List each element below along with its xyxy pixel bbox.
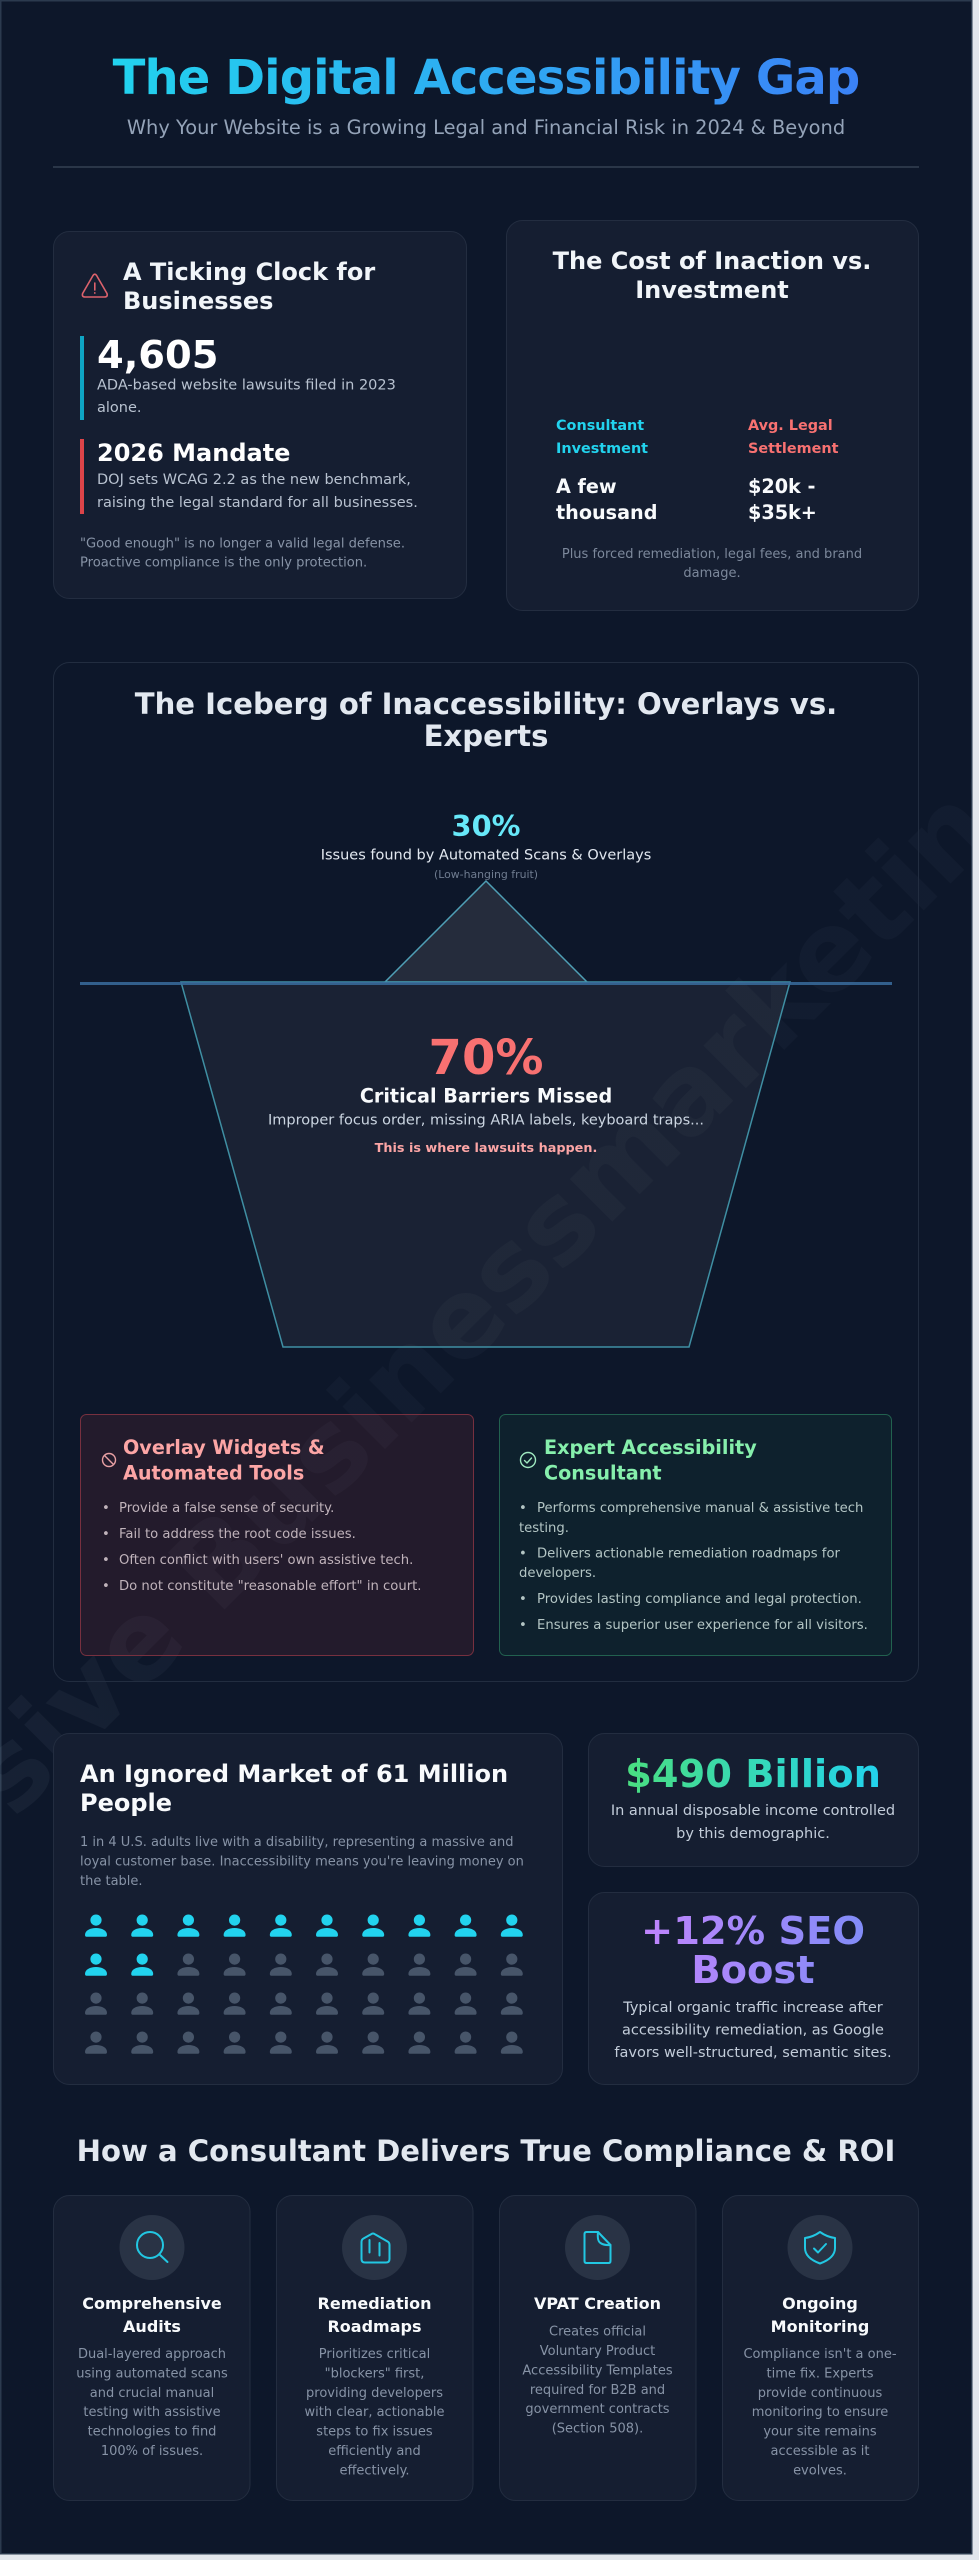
label: 70 percent: Critical Barriers Missed: [360, 1084, 612, 1108]
column: consultant: A few: [556, 475, 617, 498]
title: Comprehensive: [82, 2294, 222, 2313]
stat: 2026 mandate: raising the legal standard for all businesses.: [97, 495, 418, 511]
list: [519, 1501, 868, 1633]
heading: A Ticking Clock for: [123, 258, 375, 286]
icon: check circle: [520, 1452, 536, 1468]
heading: Investment: [635, 276, 789, 304]
column: settlement: $35k+: [748, 501, 817, 524]
column: settlement: Settlement: [748, 441, 839, 457]
heading: The Iceberg of Inaccessibility: Overlays vs.: [135, 687, 837, 721]
pictogram: people: [85, 1914, 523, 2054]
stat value: +12% SEO: [641, 1909, 865, 1954]
title: The Digital Accessibility Gap: [113, 50, 859, 106]
label: 70 percent: 70%: [429, 1030, 543, 1086]
panel: overlay widgets: [80, 1414, 474, 1656]
description: monitoring to ensure: [752, 2405, 888, 2420]
panel: expert consultant: [500, 1414, 892, 1656]
description: effectively.: [339, 2464, 410, 2478]
description: efficiently and: [328, 2444, 421, 2459]
stat description: favors well-structured, semantic sites.: [614, 2045, 892, 2061]
description: required for B2B and: [530, 2383, 665, 2398]
section heading: How a Consultant Delivers True Compliance & ROI: [77, 2134, 895, 2168]
column: settlement: $20k -: [748, 475, 815, 498]
column: settlement: Avg. Legal: [748, 418, 833, 434]
description: (Section 508).: [552, 2422, 643, 2436]
list: •: [102, 1501, 110, 1516]
card: monitoring: [722, 2196, 918, 2500]
list: •: [102, 1579, 110, 1594]
list: [102, 1501, 422, 1594]
icon: roadmap: [342, 2215, 407, 2280]
heading: Overlay Widgets &: [123, 1436, 325, 1459]
stat: 2026 mandate: DOJ sets WCAG 2.2 as the new benchmark,: [97, 472, 411, 488]
water line: [80, 982, 892, 985]
stat description: In annual disposable income controlled: [611, 1803, 895, 1819]
heading: Expert Accessibility: [544, 1436, 757, 1459]
heading: Experts: [424, 719, 548, 753]
note: "Good enough" is no longer a valid legal defense.: [80, 536, 405, 552]
list: Ensures a superior user experience for all visitors.: [537, 1618, 868, 1633]
description: "blockers" first,: [325, 2366, 424, 2382]
list: •: [102, 1553, 110, 1568]
stat description: by this demographic.: [676, 1826, 830, 1842]
description: 100% of issues.: [101, 2444, 203, 2459]
description: time fix. Experts: [766, 2366, 874, 2382]
description: Creates official: [549, 2324, 646, 2340]
stat: lawsuits: [80, 333, 396, 420]
description: Dual-layered approach: [78, 2347, 226, 2362]
list: Often conflict with users' own assistive tech.: [119, 1553, 413, 1568]
stat: 2026 mandate: [80, 439, 418, 514]
description: Prioritizes critical: [319, 2347, 430, 2362]
column: consultant: Investment: [556, 441, 648, 457]
subtitle: Why Your Website is a Growing Legal and Financial Risk in 2024 & Beyond: [127, 116, 845, 139]
stat value: $490 Billion: [625, 1752, 881, 1797]
stat description: Typical organic traffic increase after: [622, 2000, 883, 2016]
list: •: [519, 1546, 527, 1562]
stat: lawsuits: alone.: [97, 400, 142, 416]
heading: Automated Tools: [123, 1462, 304, 1484]
panel: cost of inaction: [506, 220, 918, 610]
list: Performs comprehensive manual & assistive tech: [537, 1501, 863, 1516]
heading: People: [80, 1789, 172, 1817]
description: provide continuous: [758, 2386, 882, 2401]
heading: Consultant: [544, 1462, 662, 1484]
panel: 490 billion: [588, 1734, 918, 1866]
description: testing with assistive: [83, 2405, 221, 2420]
description: accessible as it: [770, 2444, 870, 2459]
header: [113, 50, 859, 139]
description: providing developers: [306, 2386, 443, 2401]
title: Remediation: [318, 2294, 431, 2313]
description: evolves.: [793, 2464, 847, 2478]
icon: magnifier: [120, 2215, 184, 2280]
stat: lawsuits: ADA-based website lawsuits filed in 2023: [97, 378, 396, 394]
list: •: [519, 1618, 527, 1633]
column: consultant: Consultant: [556, 418, 644, 434]
description: and crucial manual: [90, 2386, 214, 2401]
list: Fail to address the root code issues.: [119, 1527, 356, 1542]
title: Monitoring: [771, 2317, 869, 2336]
label: 30 percent: [321, 809, 651, 881]
icon: warning triangle: [82, 274, 107, 297]
column: settlement: [748, 418, 839, 524]
note: Proactive compliance is the only protection.: [80, 556, 367, 570]
paragraph: 1 in 4 U.S. adults live with a disability, representing a massive and: [80, 1835, 514, 1850]
panel: a ticking clock: [54, 232, 466, 598]
list: Do not constitute "reasonable effort" in court.: [119, 1579, 422, 1594]
stat value: Boost: [691, 1948, 815, 1993]
panel: seo boost: [588, 1892, 918, 2084]
heading: The Cost of Inaction vs.: [553, 247, 871, 275]
label: 70 percent: This is where lawsuits happen.: [375, 1141, 597, 1156]
label: 70 percent: [268, 1030, 704, 1156]
title: VPAT Creation: [534, 2294, 661, 2313]
paragraph: the table.: [80, 1874, 143, 1889]
description: using automated scans: [76, 2366, 228, 2382]
label: 70 percent: Improper focus order, missing ARIA labels, keyboard traps...: [268, 1112, 704, 1128]
stat: 2026 mandate: 2026 Mandate: [97, 439, 290, 467]
description: your site remains: [763, 2424, 877, 2440]
note: Plus forced remediation, legal fees, and brand: [562, 547, 862, 562]
list: •: [519, 1592, 527, 1607]
card: vpat: [500, 2196, 696, 2500]
iceberg body: [181, 982, 790, 1347]
heading: Businesses: [123, 287, 273, 315]
list: •: [102, 1527, 110, 1542]
icon: document: [565, 2215, 630, 2280]
description: with clear, actionable: [305, 2405, 444, 2420]
description: Accessibility Templates: [522, 2364, 673, 2378]
title: Ongoing: [782, 2294, 858, 2313]
iceberg diagram: [80, 809, 892, 1347]
description: government contracts: [525, 2402, 670, 2417]
description: Compliance isn't a one-: [743, 2347, 897, 2362]
list: developers.: [519, 1566, 596, 1581]
description: technologies to find: [88, 2424, 216, 2440]
note: damage.: [683, 566, 741, 581]
label: 30 percent: 30%: [452, 809, 520, 843]
heading: An Ignored Market of 61 Million: [80, 1760, 508, 1788]
column: consultant: thousand: [556, 501, 657, 524]
list: Provides lasting compliance and legal protection.: [537, 1592, 862, 1607]
label: 30 percent: (Low-hanging fruit): [434, 868, 538, 881]
paragraph: loyal customer base. Inaccessibility means you're leaving money on: [80, 1854, 524, 1870]
description: Voluntary Product: [540, 2344, 655, 2359]
list: testing.: [519, 1521, 569, 1536]
panel: ignored market: [54, 1734, 562, 2084]
list: •: [519, 1501, 527, 1516]
card: audits: [54, 2196, 250, 2500]
stat: lawsuits: 4,605: [97, 333, 218, 378]
stat description: accessibility remediation, as Google: [622, 2022, 884, 2038]
card: roadmaps: [276, 2196, 473, 2500]
panel: iceberg: [54, 662, 918, 1682]
column: consultant: [556, 418, 657, 524]
icon: shield: [788, 2215, 852, 2280]
label: 30 percent: Issues found by Automated Scans & Overlays: [321, 848, 651, 864]
list: Delivers actionable remediation roadmaps for: [537, 1546, 841, 1562]
iceberg tip: [385, 881, 587, 982]
list: Provide a false sense of security.: [119, 1501, 334, 1516]
icon: prohibited: [102, 1454, 116, 1466]
title: Audits: [123, 2317, 181, 2336]
title: Roadmaps: [327, 2317, 422, 2336]
description: steps to fix issues: [316, 2424, 433, 2440]
